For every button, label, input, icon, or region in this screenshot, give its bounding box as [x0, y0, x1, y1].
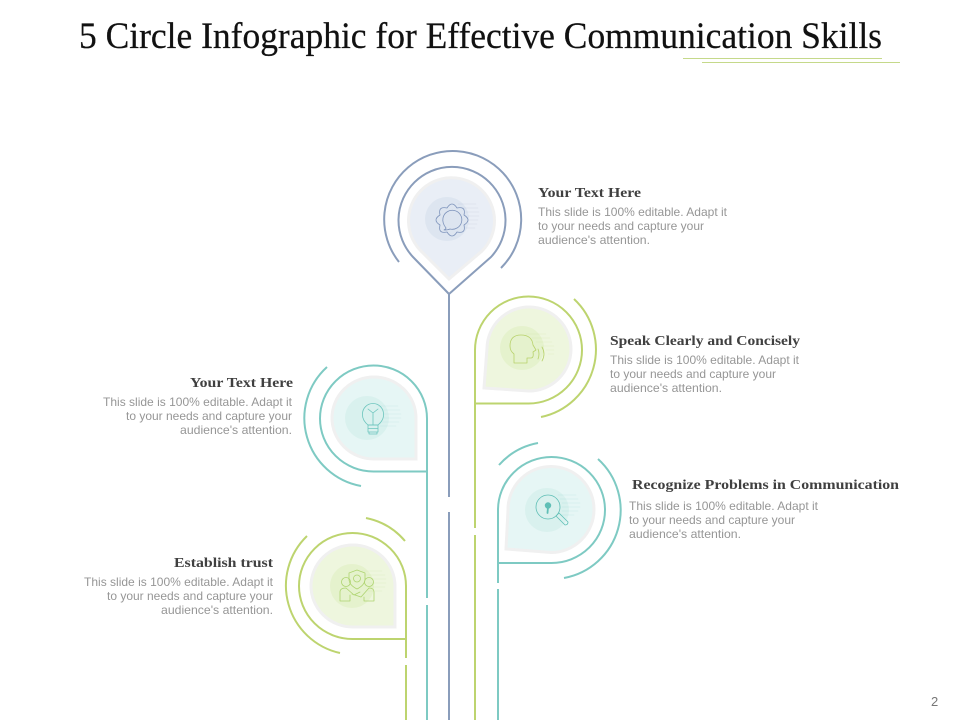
outer arcs: [499, 443, 621, 578]
title: 5 Circle Infographic for Effective Communication Skills: [79, 15, 882, 56]
text block: speak clearly: Speak Clearly and Concisely: [610, 333, 800, 348]
teardrop fill: [311, 545, 395, 627]
text block: your text here left: to your needs and capture your: [126, 409, 292, 423]
pin outline with stem: [320, 366, 427, 720]
outer arc: [541, 299, 596, 417]
text block: your text here top: Your Text Here: [538, 185, 641, 200]
text block: speak clearly: to your needs and capture your: [610, 367, 776, 381]
text block: establish trust: to your needs and capture your: [107, 589, 273, 603]
text block: establish trust: audience's attention.: [161, 603, 273, 617]
text block: your text here top: audience's attention.: [538, 233, 650, 247]
icon: handshake with shield: [340, 570, 386, 601]
icon: magnifier with keyhole: [536, 495, 580, 525]
panel: pin 1 blue: [384, 151, 521, 720]
pin outline with stem: [475, 296, 582, 720]
inner circle: [425, 197, 469, 241]
text block: recognize problems: audience's attention.: [629, 527, 741, 541]
icon: light bulb: [362, 404, 401, 434]
text block: recognize problems: to your needs and capture your: [629, 513, 795, 527]
pin outline with stem: [299, 533, 406, 720]
text block: establish trust: [84, 555, 274, 617]
text block: your text here top: to your needs and capture your: [538, 219, 704, 233]
icon: speaking head: [510, 334, 554, 363]
text block: speak clearly: [610, 333, 800, 395]
outer arc: [384, 151, 521, 268]
pin outline with stem: [398, 167, 506, 720]
text block: establish trust: Establish trust: [174, 555, 274, 570]
text block: recognize problems: Recognize Problems in Communication: [632, 477, 900, 492]
icon: gear with speech bubble: [436, 204, 479, 236]
text block: your text here top: [538, 185, 728, 247]
stem gaps: [403, 497, 501, 665]
inner circle: [330, 564, 374, 608]
text block: your text here left: audience's attention.: [180, 423, 292, 437]
inner circle: [345, 396, 389, 440]
teardrop fill: [484, 307, 571, 391]
text block: recognize problems: This slide is 100% editable. Adapt it: [629, 499, 819, 513]
text block: your text here left: Your Text Here: [190, 375, 293, 390]
outer arc: [304, 367, 361, 486]
page number: 2: [931, 694, 938, 709]
text block: speak clearly: audience's attention.: [610, 381, 722, 395]
text block: speak clearly: This slide is 100% editable. Adapt it: [610, 353, 800, 367]
panel: pin 4 recognize problems: [498, 443, 621, 720]
inner circle: [500, 326, 544, 370]
teardrop fill: [506, 466, 594, 552]
panel: pin 3 idea: [304, 366, 427, 720]
teardrop fill: [332, 377, 416, 459]
text block: recognize problems: [629, 477, 900, 541]
text block: establish trust: This slide is 100% editable. Adapt it: [84, 575, 274, 589]
panel: pin 5 establish trust: [286, 518, 406, 720]
inner circle: [525, 488, 569, 532]
text block: your text here top: This slide is 100% editable. Adapt it: [538, 205, 728, 219]
panel: pin 2 speak clearly: [475, 296, 596, 720]
text block: your text here left: [103, 375, 293, 437]
text block: your text here left: This slide is 100% editable. Adapt it: [103, 395, 293, 409]
pin outline with stem: [498, 457, 605, 720]
teardrop fill: [408, 178, 494, 279]
outer arcs: [286, 518, 405, 653]
